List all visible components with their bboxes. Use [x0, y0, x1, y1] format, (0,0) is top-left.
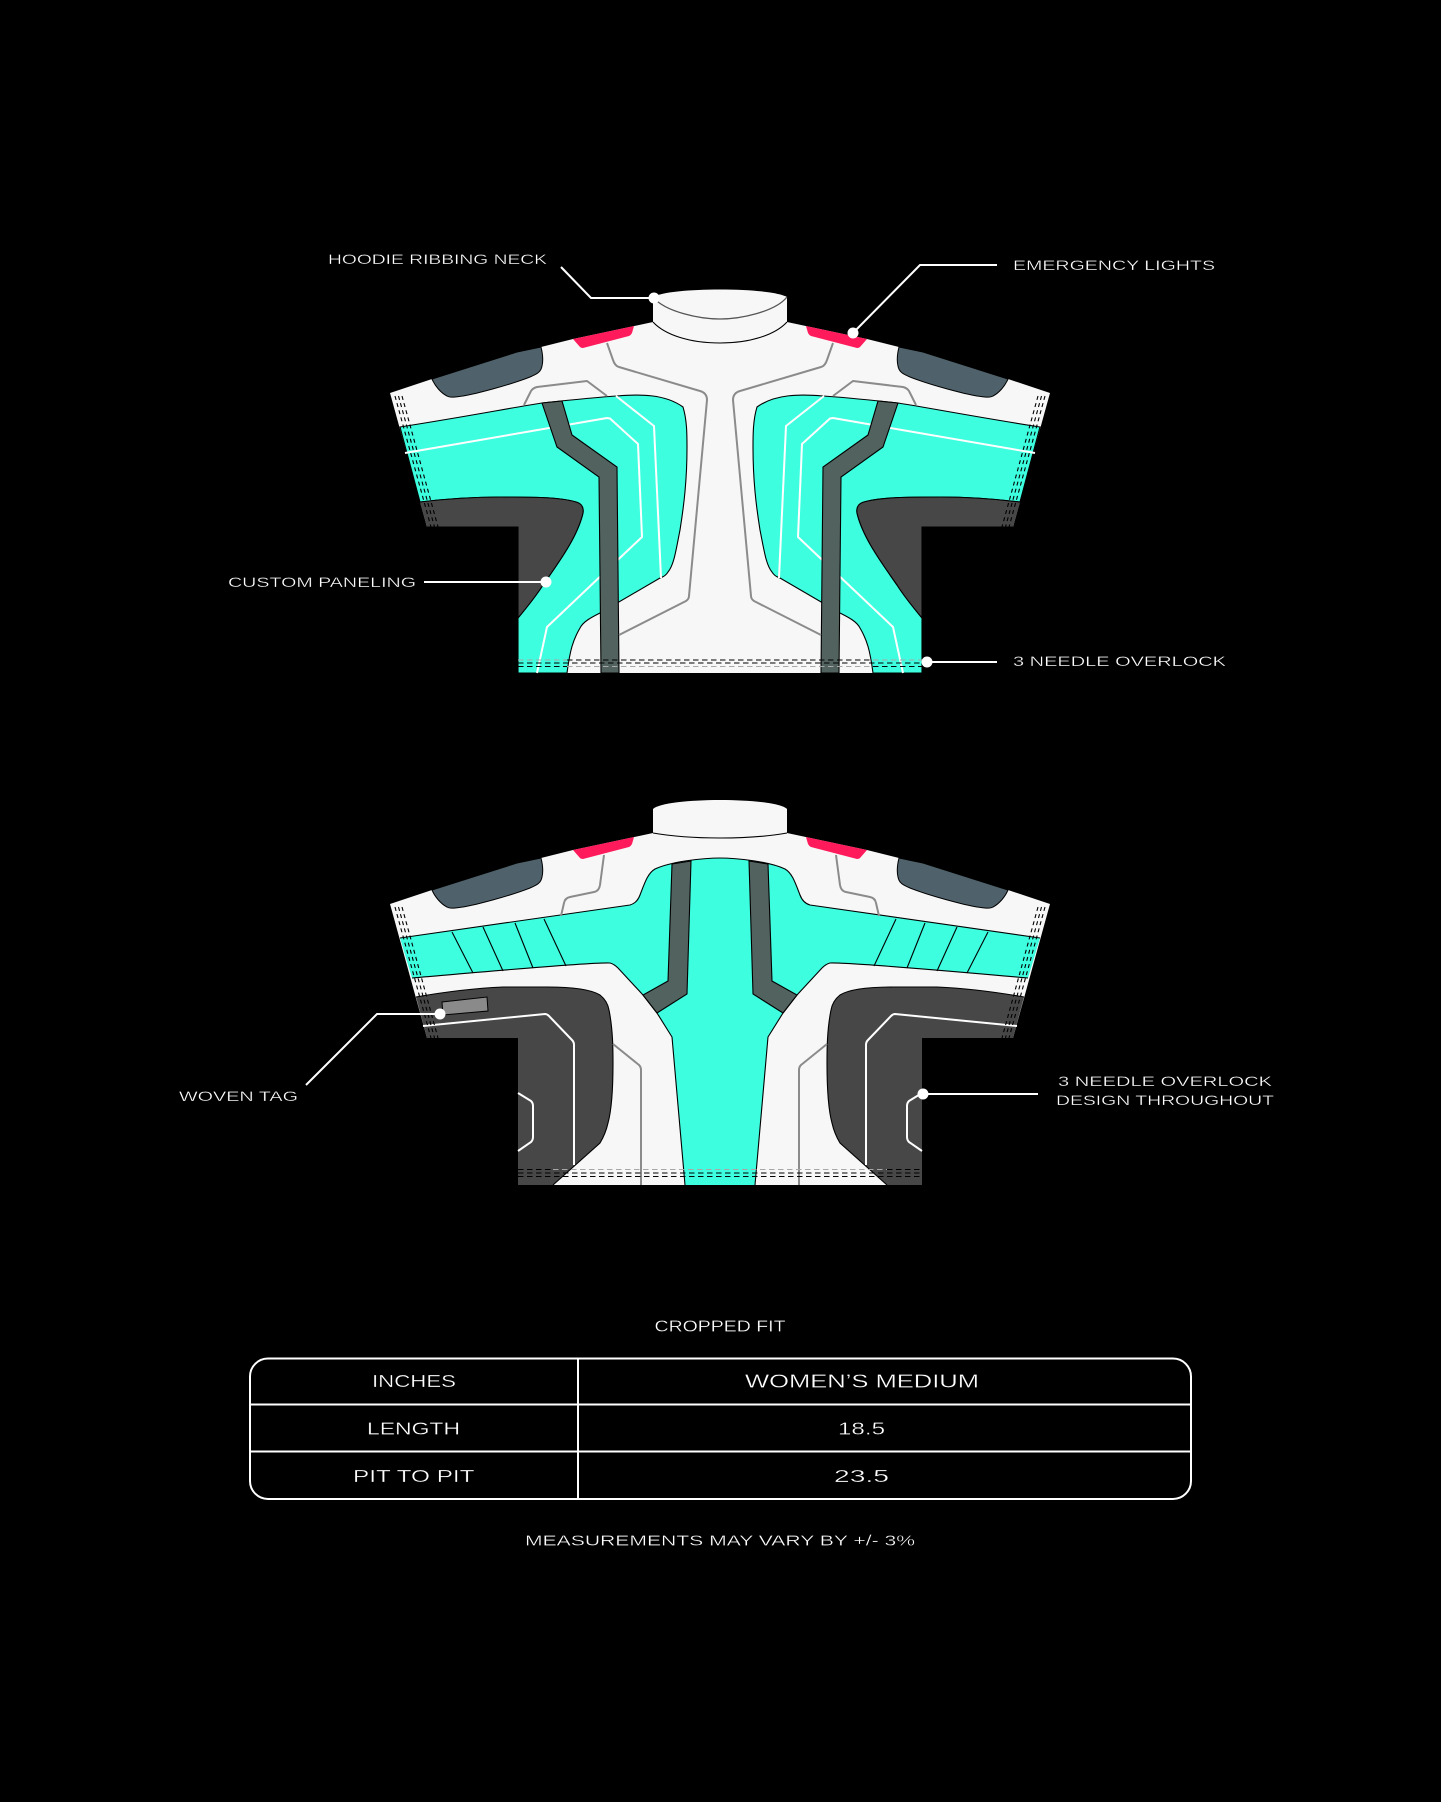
callout: emergency lights: EMERGENCY LIGHTS [1013, 257, 1215, 273]
callout: 3 needle overlock design throughout: 3 NEEDLE OVERLOCK [1058, 1073, 1273, 1089]
callout: custom paneling [228, 574, 552, 590]
callout: hoodie ribbing neck [328, 251, 660, 304]
front left half [390, 322, 722, 673]
pit to pit row: PIT TO PIT [353, 1466, 475, 1486]
slate shoulder patch [432, 347, 543, 397]
red emergency light [573, 326, 634, 348]
back right half [718, 833, 1050, 1185]
back view jacket [390, 800, 1050, 1185]
callout: 3 needle overlock [922, 653, 1227, 669]
hem stitching [518, 1170, 922, 1176]
hoodie collar [653, 290, 787, 343]
size table [250, 1358, 1191, 1499]
red emergency light [573, 837, 634, 859]
back left half [390, 833, 722, 1185]
front view jacket [390, 290, 1050, 673]
teal yoke and centre panel [400, 858, 722, 1185]
hem stitching [518, 660, 922, 666]
table frame [250, 1358, 1191, 1499]
length row: LENGTH [367, 1418, 460, 1438]
grey seam lines [613, 1044, 641, 1185]
teal panel [400, 395, 687, 673]
white seam lines [405, 418, 642, 673]
grey seam lines [607, 343, 707, 635]
woven tag [442, 997, 488, 1015]
heading: cropped fit: CROPPED FIT [654, 1318, 786, 1336]
slate strap [542, 401, 619, 673]
pit to pit row: 23.5 [834, 1466, 889, 1486]
callout: 3 needle overlock design throughout [918, 1073, 1275, 1108]
length row: 18.5 [838, 1418, 885, 1438]
length row [367, 1418, 885, 1438]
dark lower panel [420, 497, 583, 618]
back body base [390, 833, 722, 1185]
front body base [390, 322, 722, 673]
callout: 3 needle overlock: 3 NEEDLE OVERLOCK [1013, 653, 1227, 669]
sleeve stitching [395, 907, 438, 1038]
measurement note: MEASUREMENTS MAY VARY BY +/- 3% [525, 1532, 915, 1550]
callout: custom paneling: CUSTOM PANELING [228, 574, 416, 590]
callout: 3 needle overlock design throughout: DESIGN THROUGHOUT [1056, 1092, 1275, 1108]
header row: INCHES [372, 1371, 456, 1391]
header row [372, 1370, 979, 1392]
callout: woven tag [179, 1008, 446, 1104]
pit to pit row [353, 1466, 889, 1486]
header row: WOMEN’S MEDIUM [745, 1370, 979, 1392]
callout: hoodie ribbing neck: HOODIE RIBBING NECK [328, 251, 548, 267]
back collar [653, 800, 787, 838]
front right half [718, 322, 1050, 673]
callout: woven tag: WOVEN TAG [179, 1088, 298, 1104]
white seam lines [423, 1014, 574, 1165]
outline under sleeve [427, 527, 518, 618]
teal panel stripes [452, 919, 566, 973]
callout: emergency lights [848, 257, 1215, 338]
slate shoulder patch [432, 858, 543, 908]
slate strap [643, 861, 691, 1013]
sleeve stitching [395, 396, 438, 527]
dark lower panel [416, 987, 613, 1185]
